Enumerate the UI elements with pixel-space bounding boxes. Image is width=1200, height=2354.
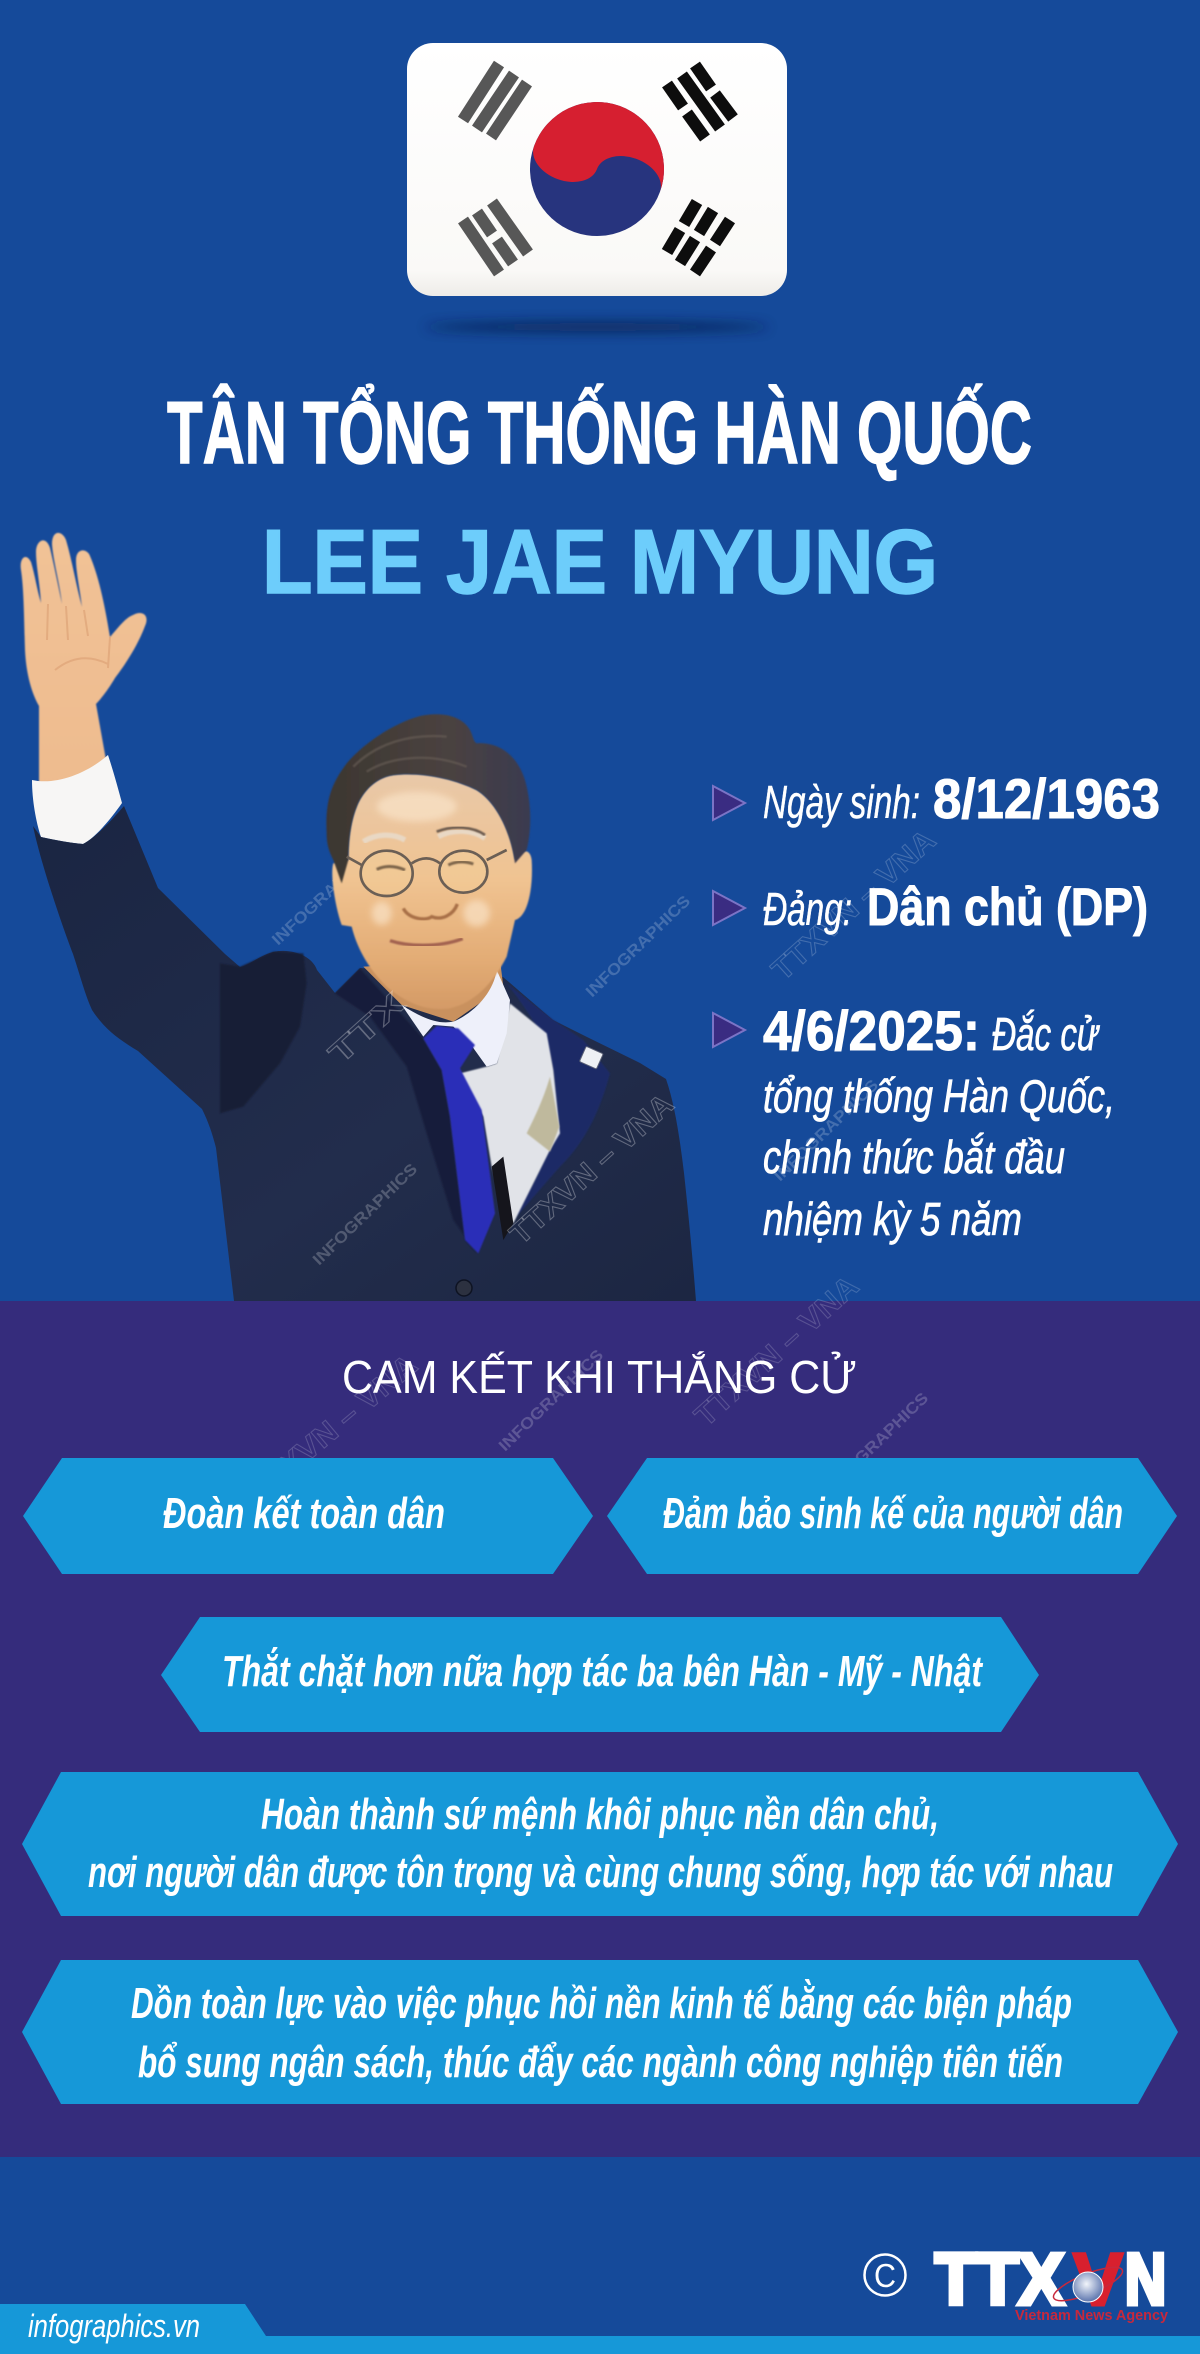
jacket xyxy=(33,806,696,1301)
watermarks behind content: INFOGRAPHICS xyxy=(771,1077,882,1185)
commitment 1: Đoàn kết toàn dân xyxy=(163,1489,445,1538)
watermarks behind content: TTXVN – VNA xyxy=(243,1348,424,1507)
beige scarf fold xyxy=(527,1077,559,1152)
section heading: CAM KẾT KHI THẮNG CỬ xyxy=(342,1351,857,1403)
taegeuk xyxy=(511,83,683,255)
photo: Lee Jae Myung waving xyxy=(21,533,696,1301)
sleeve armpit fold xyxy=(220,952,307,1113)
skin highlights xyxy=(372,792,490,927)
logo: TTXVN: Vietnam News Agency xyxy=(1015,2307,1169,2324)
info: date of birth: Ngày sinh: xyxy=(763,776,920,828)
logo: TTXVN: TTX xyxy=(935,2240,1064,2320)
watermarks over photo: INFOGRAPHICS xyxy=(310,1161,421,1269)
tie xyxy=(423,1026,495,1253)
logo: TTXVN xyxy=(935,2238,1169,2324)
bullet xyxy=(713,891,745,925)
face xyxy=(332,774,532,1009)
flag shadow xyxy=(425,322,769,332)
watermarks over photo: TTXVN – VNA xyxy=(504,1087,680,1251)
watermarks behind content: INFOGRAPHICS xyxy=(496,1347,607,1455)
icon: South Korean flag xyxy=(407,43,787,296)
eyes xyxy=(377,862,473,870)
watermarks behind content: INFOGRAPHICS xyxy=(821,1390,932,1498)
palm creases xyxy=(47,604,110,670)
info: election date: nhiệm kỳ 5 năm xyxy=(763,1193,1022,1245)
info: date of birth xyxy=(713,767,1160,830)
detail of neck, shirt, tie and head, drawn in 3x coordinates xyxy=(220,714,610,1253)
right lapel xyxy=(507,983,610,1220)
trigram bottom right xyxy=(667,202,730,273)
logo: TTXVN: N xyxy=(1125,2240,1166,2320)
trigram top left xyxy=(463,64,527,137)
commitment 4 xyxy=(22,1772,1178,1916)
hair highlights xyxy=(353,736,467,772)
commitment 4: Hoàn thành sứ mệnh khôi phục nền dân chủ, xyxy=(261,1790,939,1839)
bullet xyxy=(713,786,745,820)
glasses xyxy=(347,850,507,896)
watermarks behind content: INFOGRAPHICS xyxy=(269,842,382,949)
name heading: LEE JAE MYUNG xyxy=(262,512,938,613)
watermarks over photo: TTX xyxy=(323,986,412,1071)
shirt cuff xyxy=(32,755,122,844)
info: party: Dân chủ (DP) xyxy=(867,878,1148,937)
hair xyxy=(326,714,530,883)
info: election date: 4/6/2025: xyxy=(763,999,980,1062)
bullet xyxy=(713,1013,745,1047)
eyebrows xyxy=(363,831,485,842)
info: election date: tổng thống Hàn Quốc, xyxy=(763,1070,1115,1122)
trigram bottom left xyxy=(463,202,528,273)
watermarks behind content: TTXVN – VNA xyxy=(766,823,942,987)
commitment 5 xyxy=(22,1960,1178,2104)
lapel pin xyxy=(579,1046,603,1069)
shirt front xyxy=(460,1003,560,1223)
mouth xyxy=(390,939,463,945)
neck xyxy=(363,960,503,1022)
raised hand xyxy=(21,533,147,788)
commitment 1 xyxy=(23,1458,593,1574)
watermarks behind content: INFOGRAPHICS xyxy=(583,893,694,1001)
copyright symbol xyxy=(864,2254,906,2296)
trigram top right xyxy=(667,65,733,138)
info: election date: Đắc cử xyxy=(992,1008,1100,1060)
commitment 2 xyxy=(607,1458,1177,1574)
commitment 3 xyxy=(161,1617,1039,1732)
logo: TTXVN: V xyxy=(1073,2238,1123,2321)
watermarks over photo xyxy=(310,986,680,1269)
info: date of birth: 8/12/1963 xyxy=(933,767,1160,830)
watermarks behind content: TTXVN – VNA xyxy=(689,1269,865,1433)
footer url: infographics.vn xyxy=(28,2308,200,2344)
copyright symbol: C xyxy=(874,2257,896,2294)
watermarks behind content xyxy=(243,823,942,1507)
footer bar xyxy=(0,2304,1200,2354)
left lapel xyxy=(335,968,477,1253)
panel: commitments background xyxy=(0,1301,1200,2157)
info: party: Đảng: xyxy=(763,883,852,935)
jacket button xyxy=(456,1280,472,1296)
dark gap xyxy=(492,1157,513,1240)
nose xyxy=(403,904,457,919)
info: election date: chính thức bắt đầu xyxy=(763,1131,1065,1183)
collar xyxy=(402,970,510,1067)
info: election date xyxy=(713,999,1115,1245)
info: party xyxy=(713,878,1148,937)
